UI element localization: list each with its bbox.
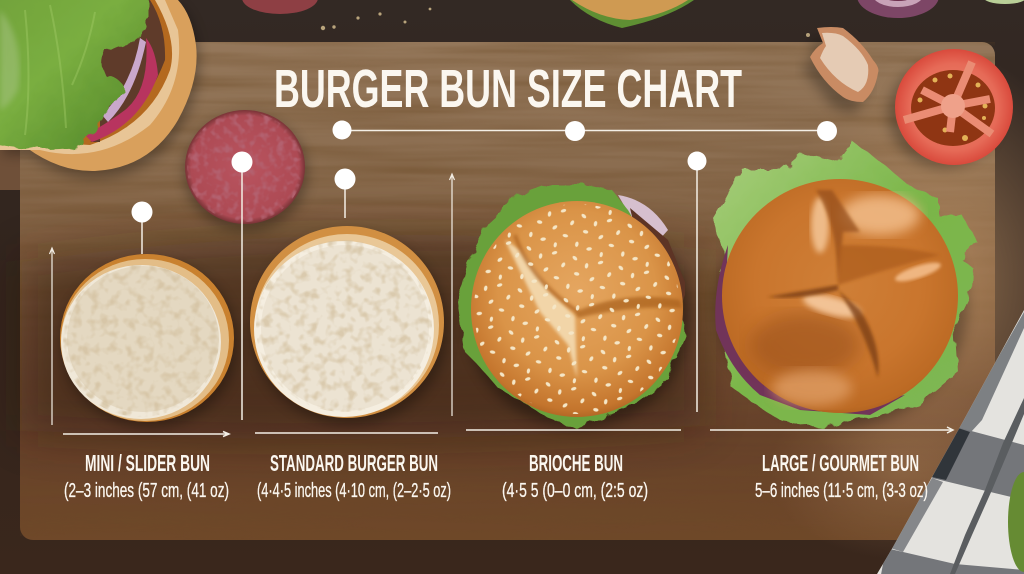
icon: sesame seeds on table (321, 8, 810, 37)
line: brioche width (466, 429, 681, 431)
title: BURGER BUN SIZE CHART (274, 59, 742, 119)
icon: bun at top edge (570, 0, 694, 28)
icon: standard burger bun (250, 226, 448, 425)
icon: large gourmet bun with lettuce (713, 142, 977, 428)
icon: mini slider bun (60, 254, 238, 428)
size marker lines and dots (50, 120, 953, 436)
arrow: large width (710, 427, 953, 433)
icon: red onion slice at top edge (857, 0, 939, 18)
icon: raw beef patty (184, 110, 308, 231)
line: standard width (255, 432, 438, 434)
marker: standard bun height (232, 152, 252, 420)
label: mini slider bun (64, 450, 229, 502)
label: brioche bun (502, 450, 648, 502)
marker: mini bun (132, 202, 152, 254)
icon: top-left open burger with lettuce (0, 0, 200, 178)
marker: standard bun top (334, 168, 356, 218)
marker: large bun height (688, 152, 706, 412)
icon: brioche bun with lettuce (458, 185, 690, 428)
icon: tomato slice (888, 49, 1013, 168)
arrow: mini width (63, 432, 229, 436)
icon: grilled chicken piece (802, 27, 878, 114)
icon: checkered kitchen towel (877, 310, 1024, 574)
icon: lime wedge at top edge (983, 0, 1024, 4)
icon: green leaf at lower right (1008, 472, 1024, 572)
label: standard burger bun: STANDARD BURGER BUN (270, 450, 438, 476)
top scale line (332, 120, 837, 141)
label: large gourmet bun (755, 450, 928, 502)
label: brioche bun: BRIOCHE BUN (529, 450, 623, 476)
label: mini slider bun: (2–3 inches (57 cm, (41 oz) (64, 480, 229, 502)
icon: patty at top edge (242, 0, 318, 14)
arrow: brioche height (450, 174, 454, 416)
label: standard burger bun (257, 450, 451, 502)
arrow: mini bun height (50, 248, 54, 425)
label: standard burger bun: (4·4·5 inches (4·10 cm, (2–2·5 oz) (257, 480, 451, 502)
label: mini slider bun: MINI / SLIDER BUN (85, 450, 210, 476)
label: brioche bun: (4·5 5 (0–0 cm, (2:5 oz) (502, 480, 648, 502)
label: large gourmet bun: 5–6 inches (11·5 cm, (3-3 oz) (755, 480, 928, 502)
